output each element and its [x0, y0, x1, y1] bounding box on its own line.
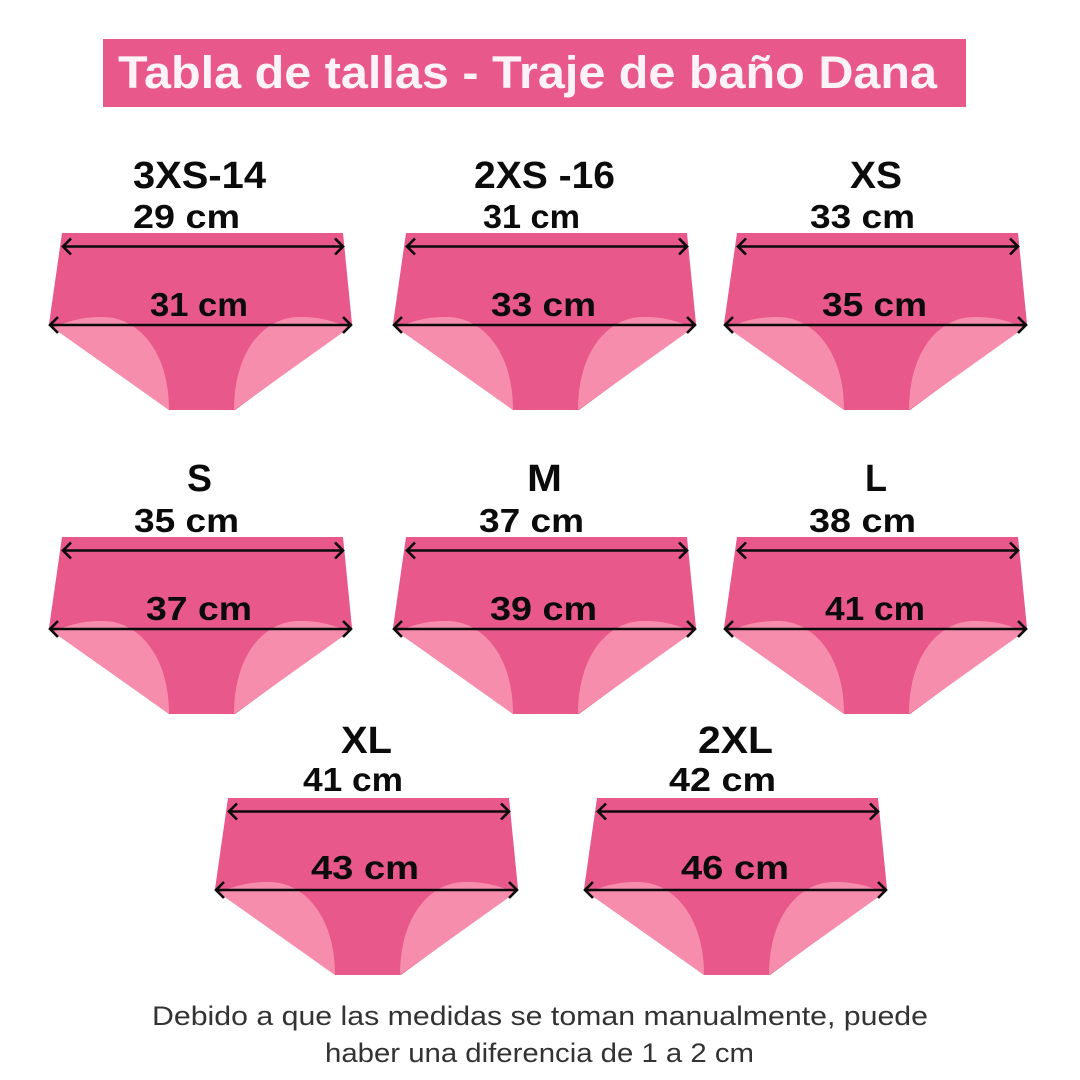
size panel: S: 35 cm	[134, 502, 239, 539]
size panel: XL: 43 cm	[311, 849, 419, 886]
size panel: XS: XS	[850, 155, 902, 197]
size panel: XL	[215, 720, 518, 975]
size panel: M: 37 cm	[479, 502, 584, 539]
title banner	[103, 39, 966, 107]
title banner: Tabla de tallas - Traje de baño Dana	[118, 47, 938, 98]
size panel: M: M	[527, 458, 562, 500]
size panel: M: 39 cm	[490, 590, 597, 627]
size panel: L	[724, 458, 1027, 714]
size panel: XL: XL	[341, 720, 392, 762]
size panel: 2XS-16: 2XS -16	[474, 155, 615, 197]
size panel: 2XL: 46 cm	[681, 849, 789, 886]
size panel: 2XL	[584, 720, 887, 975]
size panel: L: L	[865, 458, 887, 500]
size panel: S	[49, 458, 352, 714]
size panel: 2XL: 42 cm	[669, 761, 776, 798]
size panel: S: S	[187, 458, 212, 500]
size panel: L: 41 cm	[825, 590, 925, 627]
size panel: XL: 41 cm	[303, 761, 403, 798]
size panel: 2XS-16	[393, 155, 696, 410]
size panel: 2XS-16: 31 cm	[483, 198, 580, 235]
size panel: 2XL: 2XL	[698, 720, 773, 762]
size panel: 3XS-14: 29 cm	[133, 198, 240, 235]
footer note: Debido a que las medidas se toman manualmente, puede	[152, 1001, 928, 1031]
size panel: XS: 33 cm	[810, 198, 915, 235]
size panel: L: 38 cm	[809, 502, 916, 539]
size panel: 2XS-16: 33 cm	[491, 286, 596, 323]
size panel: XS	[724, 155, 1027, 410]
size panel: 3XS-14: 3XS-14	[133, 155, 266, 197]
size panel: 3XS-14: 31 cm	[150, 286, 248, 323]
size panel: 3XS-14	[49, 155, 352, 410]
size panel: M	[393, 458, 696, 714]
footer note: haber una diferencia de 1 a 2 cm	[325, 1038, 754, 1068]
footer note	[152, 1001, 928, 1068]
size panel: XS: 35 cm	[822, 286, 927, 323]
size panel: S: 37 cm	[146, 590, 252, 627]
